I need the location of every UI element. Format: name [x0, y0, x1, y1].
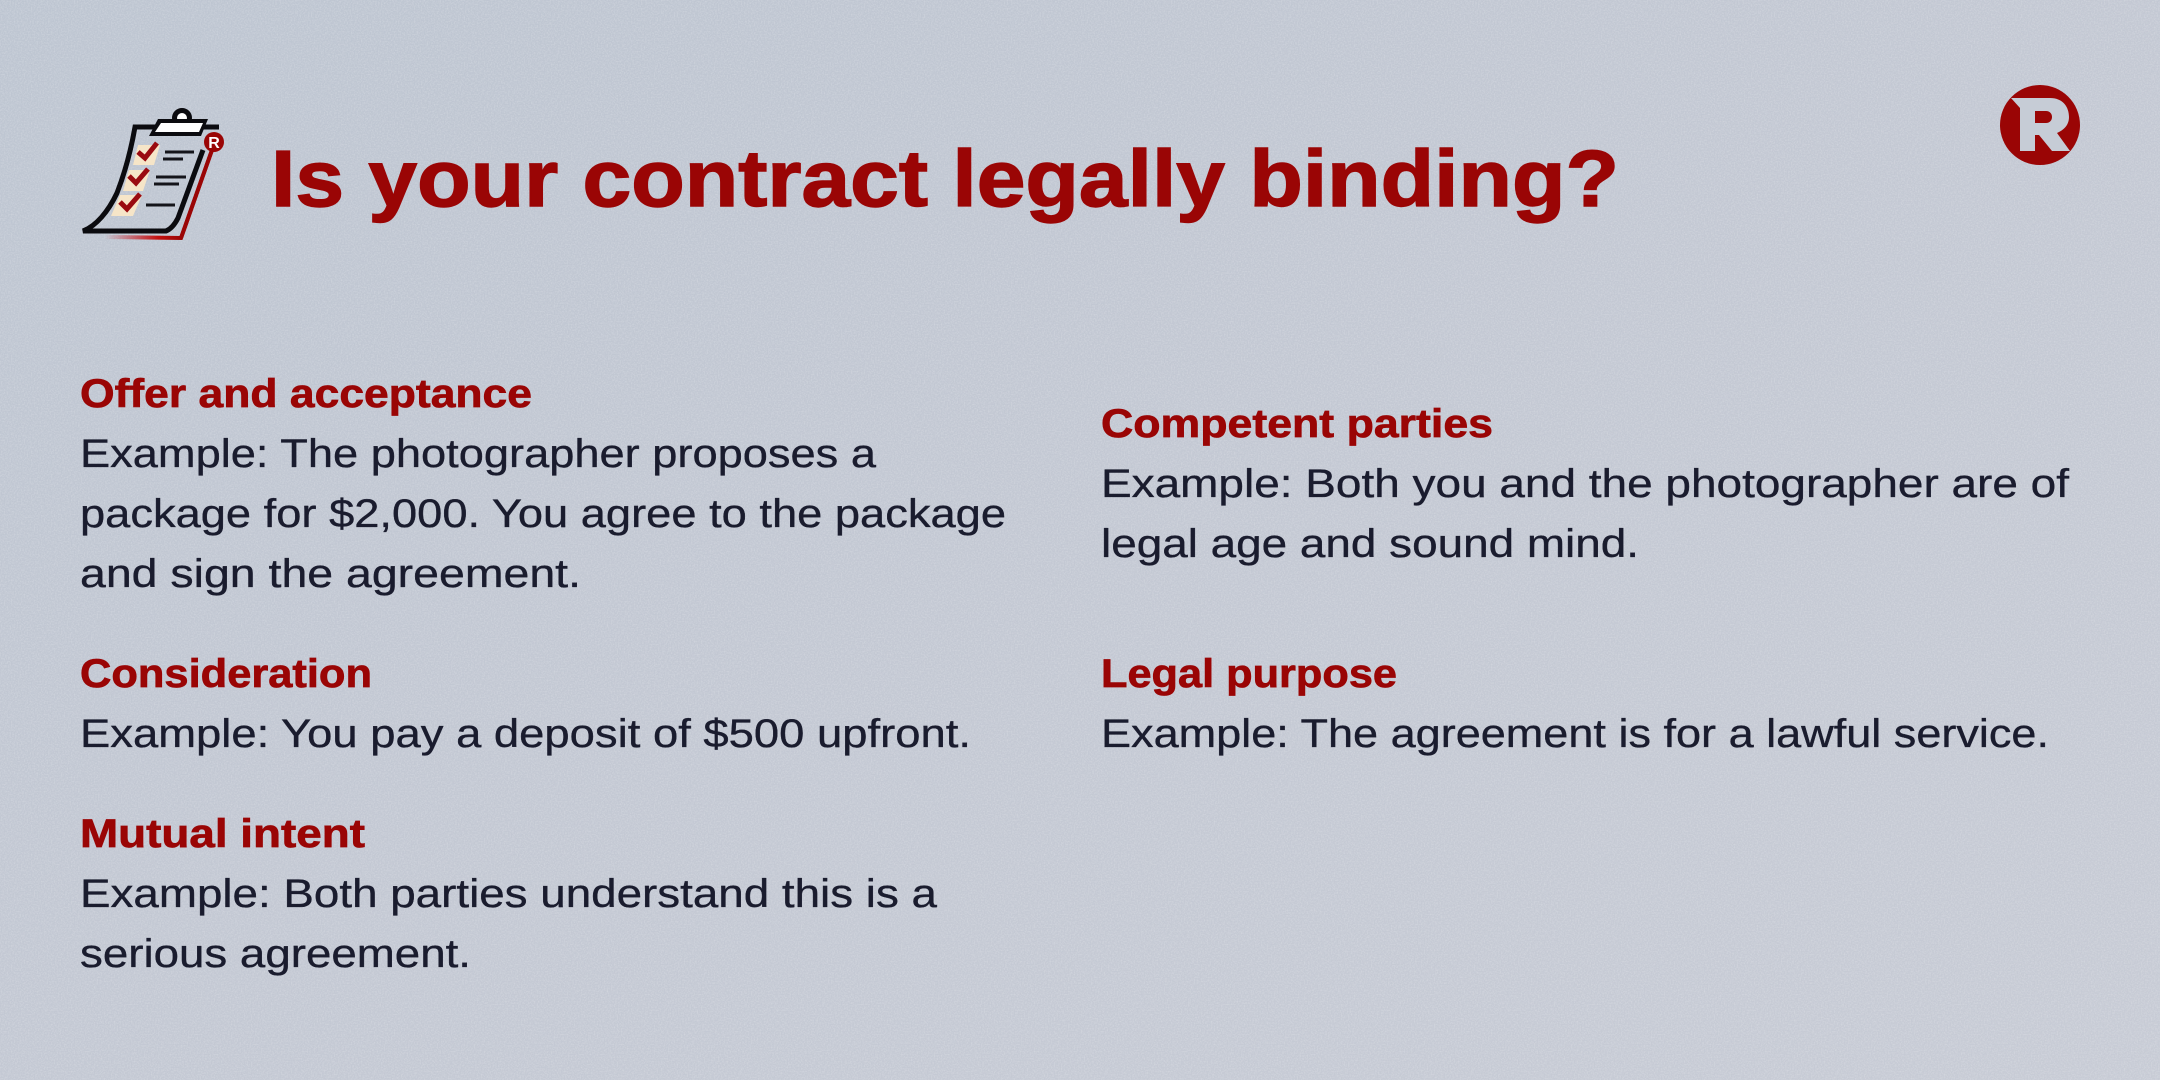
check marks	[120, 143, 157, 209]
text block: consideration	[80, 652, 971, 756]
text block: legal purpose: Legal purpose	[1101, 652, 1397, 696]
icon: clipboard checklist	[83, 110, 224, 238]
text block: mutual intent	[80, 812, 937, 976]
badge	[204, 132, 224, 152]
clipboard sheet outline	[83, 127, 219, 231]
text block: offer and acceptance: Offer and acceptance	[80, 372, 532, 416]
text block: legal purpose: Example: The agreement is for a lawful service.	[1101, 712, 2049, 756]
text block: offer and acceptance: package for $2,000. You agree to the package	[80, 492, 1006, 536]
text block: mutual intent: serious agreement.	[80, 932, 471, 976]
text block: consideration: Consideration	[80, 652, 372, 696]
text block: competent parties	[1101, 402, 2070, 566]
clip	[149, 110, 208, 136]
text block: competent parties: legal age and sound mind.	[1101, 522, 1639, 566]
text block: offer and acceptance: and sign the agreement.	[80, 552, 581, 596]
logo	[2000, 85, 2080, 165]
clipboard red shadow line	[105, 150, 212, 238]
text block: offer and acceptance: Example: The photographer proposes a	[80, 432, 876, 476]
checklist lines	[146, 152, 194, 205]
badge: R	[208, 135, 220, 152]
text block: mutual intent: Mutual intent	[80, 812, 365, 856]
text block: mutual intent: Example: Both parties understand this is a	[80, 872, 937, 916]
text block: offer and acceptance	[80, 372, 1006, 596]
text block: legal purpose	[1101, 652, 2049, 756]
text block: consideration: Example: You pay a deposit of $500 upfront.	[80, 712, 971, 756]
checkboxes	[111, 145, 160, 216]
title: Is your contract legally binding?	[271, 134, 1619, 223]
text block: competent parties: Competent parties	[1101, 402, 1493, 446]
text block: competent parties: Example: Both you and the photographer are of	[1101, 462, 2070, 506]
